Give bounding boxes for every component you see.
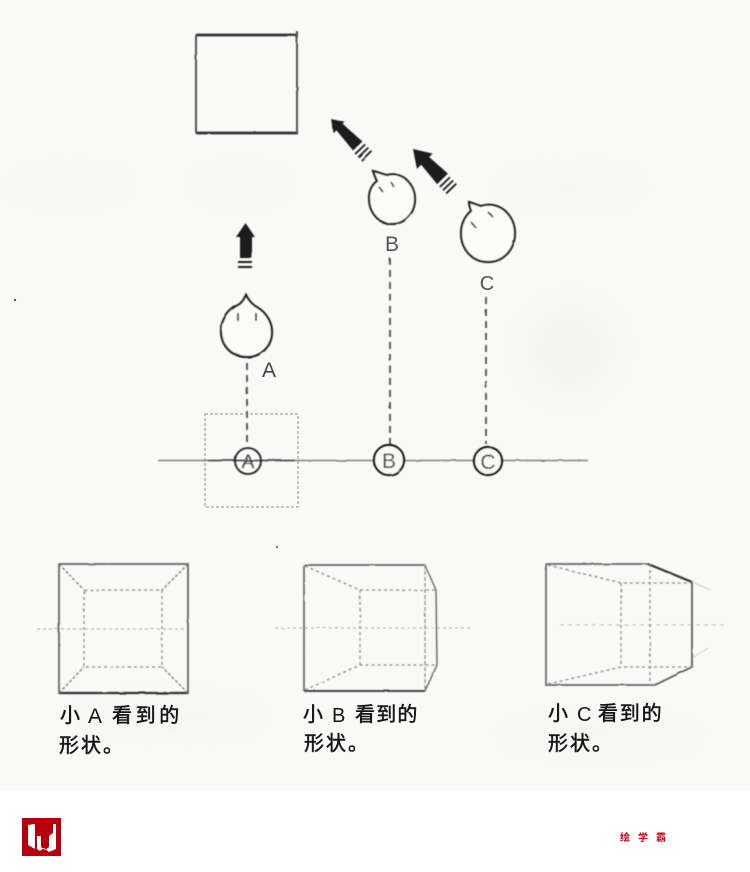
character B: [369, 171, 415, 224]
character C: [461, 202, 515, 262]
footer logo: [22, 818, 61, 856]
shape seen by A: [37, 564, 188, 693]
label B: B: [385, 233, 399, 256]
caption C: 看到的: [598, 702, 663, 725]
label A: A: [262, 359, 276, 382]
caption B: 小: [303, 703, 323, 726]
shape seen by B: [275, 565, 472, 691]
position marker B: B: [382, 450, 396, 473]
shape seen by C: [546, 564, 725, 685]
footer brand text: 绘学霸: [620, 831, 674, 844]
position marker A: A: [242, 452, 255, 473]
caption A: 小: [60, 704, 80, 727]
caption B: [303, 703, 419, 755]
arrow: C looks diagonally at the square: [405, 141, 459, 196]
caption B: 形状。: [304, 732, 370, 755]
position marker C: C: [480, 451, 496, 474]
ground line: [158, 460, 588, 462]
caption A: A: [88, 705, 102, 728]
dashed projection square: [205, 414, 298, 507]
caption C: 小: [548, 702, 568, 725]
sight lines from characters to ground line: [247, 258, 486, 445]
position marker A: [235, 448, 261, 474]
arrow: B looks diagonally at the square: [325, 113, 372, 161]
position marker C: [474, 447, 502, 475]
caption C: C: [577, 704, 591, 726]
caption C: [548, 702, 663, 755]
label C: C: [480, 273, 494, 295]
caption B: 看到的: [355, 703, 419, 726]
arrow: A looks straight at the square: [236, 223, 255, 267]
caption A: 看到的: [112, 704, 183, 727]
position marker B: [374, 445, 404, 475]
caption A: [59, 704, 183, 757]
character A: [221, 295, 272, 357]
target square: [196, 31, 298, 133]
caption B: B: [332, 705, 345, 727]
caption C: 形状。: [548, 732, 614, 755]
caption A: 形状。: [59, 734, 125, 757]
